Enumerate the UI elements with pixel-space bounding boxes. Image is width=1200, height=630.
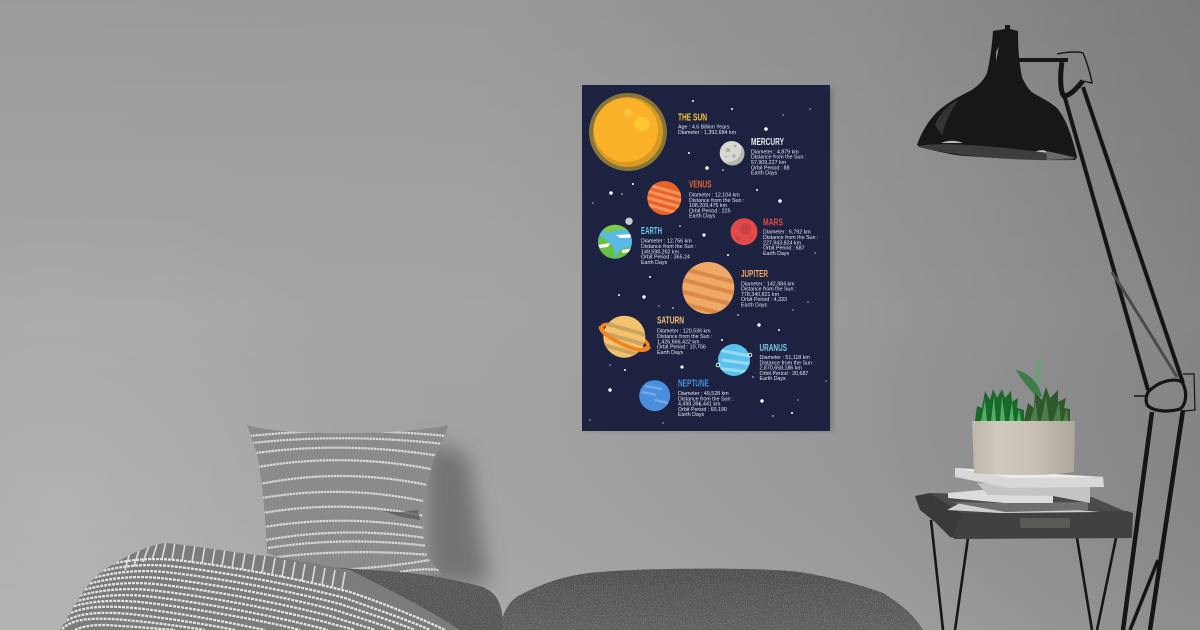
lamp: [917, 25, 1195, 630]
text: neptune: 4,498,396,441 km: [678, 402, 721, 408]
text: earth: EARTH: [641, 226, 662, 237]
text: earth: [641, 226, 696, 266]
text: jupiter: Diameter : 142,984 km: [741, 281, 795, 287]
text: jupiter: [741, 269, 796, 308]
tray front: [952, 511, 1133, 539]
planet: earth: [598, 224, 632, 259]
text: jupiter: 778,340,821 km: [741, 292, 780, 298]
text: earth: Orbit Period : 365.24: [641, 255, 690, 261]
pillow stripes: [250, 431, 446, 572]
text: saturn: 1,426,666,422 km: [657, 339, 700, 345]
striped pillow: [247, 425, 448, 575]
text: mercury: Earth Days: [751, 171, 778, 177]
planet: mercury: [720, 141, 745, 166]
succulent right: [1024, 387, 1070, 421]
text: venus: Earth Days: [689, 214, 716, 220]
text: neptune: [678, 379, 733, 418]
text: saturn: Diameter : 120,536 km: [657, 329, 711, 335]
text: earth: Distance from the Sun :: [641, 244, 696, 250]
text: uranus: URANUS: [760, 343, 787, 354]
poster background: [582, 85, 830, 431]
text: venus: [689, 179, 744, 220]
text: mars: Orbit Period : 687: [763, 246, 805, 252]
planet: uranus: [716, 344, 752, 376]
side table: [915, 493, 1133, 630]
tray left flap: [915, 493, 963, 538]
text: neptune: NEPTUNE: [678, 379, 709, 390]
star field: [589, 100, 827, 424]
planet: neptune: [639, 380, 670, 411]
planet: saturn: [599, 316, 651, 358]
text: uranus: Orbit Period : 30,687: [760, 371, 808, 377]
lamp shade: [917, 25, 1077, 160]
text: saturn: [657, 316, 712, 356]
text: mercury: Diameter : 4,879 km: [751, 149, 799, 155]
plant pot: [972, 356, 1075, 475]
text: neptune: Distance from the Sun :: [678, 396, 733, 402]
text: jupiter: JUPITER: [741, 269, 768, 280]
text: jupiter: Earth Days: [741, 302, 768, 308]
text: jupiter: Orbit Period : 4,333: [741, 297, 787, 303]
pillow shadow on wall: [425, 440, 490, 585]
text: the sun: [678, 112, 737, 136]
text: the sun: Diameter : 1,392,684 km: [678, 130, 737, 136]
knitted blanket: [60, 543, 460, 630]
poster shadow: [585, 88, 833, 431]
planet: mars: [730, 218, 758, 245]
tray back: [930, 493, 1127, 514]
text: saturn: Orbit Period : 10,756: [657, 345, 706, 351]
table legs: [931, 520, 1116, 630]
left sofa cushion: [330, 565, 503, 630]
planet: jupiter: [682, 262, 734, 314]
text: uranus: Distance from the Sun :: [760, 360, 815, 366]
sprig: [1016, 356, 1042, 398]
text: venus: Distance from the Sun :: [689, 198, 744, 204]
text: uranus: [760, 343, 815, 382]
text: earth: 149,598,262 km: [641, 249, 680, 255]
succulent left: [975, 389, 1024, 421]
text: neptune: Earth Days: [678, 412, 705, 418]
text: neptune: Diameter : 49,528 km: [678, 391, 729, 397]
planet: the sun: [589, 93, 667, 171]
text: mars: MARS: [763, 217, 783, 228]
right sofa cushion: [500, 569, 923, 630]
tray handle: [1020, 518, 1070, 528]
text: earth: Diameter : 12,756 km: [641, 239, 692, 245]
text: mercury: 57,909,227 km: [751, 160, 787, 166]
text: mercury: Orbit Period : 88: [751, 165, 790, 171]
text: mars: Diameter : 6,792 km: [763, 230, 811, 236]
text: the sun: Age : 4.6 Billion Years: [678, 124, 730, 130]
lamp highlights: [918, 46, 1076, 160]
moon: [625, 218, 633, 225]
poster: solar system: [582, 85, 830, 431]
text: venus: Orbit Period : 225: [689, 208, 731, 214]
text: neptune: Orbit Period : 60,190: [678, 407, 727, 413]
book stack: [947, 468, 1104, 513]
text: mercury: Distance from the Sun :: [751, 155, 806, 161]
text: venus: Diameter : 12,104 km: [689, 192, 740, 198]
text: venus: 108,209,475 km: [689, 203, 728, 209]
blanket fringe: [125, 541, 345, 589]
lamp rods: [1018, 52, 1195, 630]
text: uranus: Diameter : 51,118 km: [760, 355, 810, 361]
text: mars: Distance from the Sun :: [763, 235, 818, 241]
text: mars: [763, 217, 818, 257]
text: uranus: 2,870,658,186 km: [760, 366, 802, 372]
text: mercury: MERCURY: [751, 137, 784, 148]
text: saturn: Distance from the Sun :: [657, 334, 712, 340]
text: mercury: [751, 137, 806, 177]
text: saturn: SATURN: [657, 316, 684, 327]
pot body: [972, 421, 1075, 475]
pillow crease: [383, 510, 420, 520]
text: mars: Earth Days: [763, 251, 790, 257]
text: mars: 227,943,824 km: [763, 240, 802, 246]
text: uranus: Earth Days: [760, 376, 786, 382]
text: saturn: Earth Days: [657, 350, 684, 356]
planet: venus: [647, 181, 682, 215]
text: venus: VENUS: [689, 179, 712, 190]
text: the sun: THE SUN: [678, 112, 707, 124]
text: jupiter: Distance from the Sun :: [741, 287, 796, 293]
text: earth: Earth Days: [641, 260, 668, 266]
blanket stripes: [20, 559, 445, 630]
